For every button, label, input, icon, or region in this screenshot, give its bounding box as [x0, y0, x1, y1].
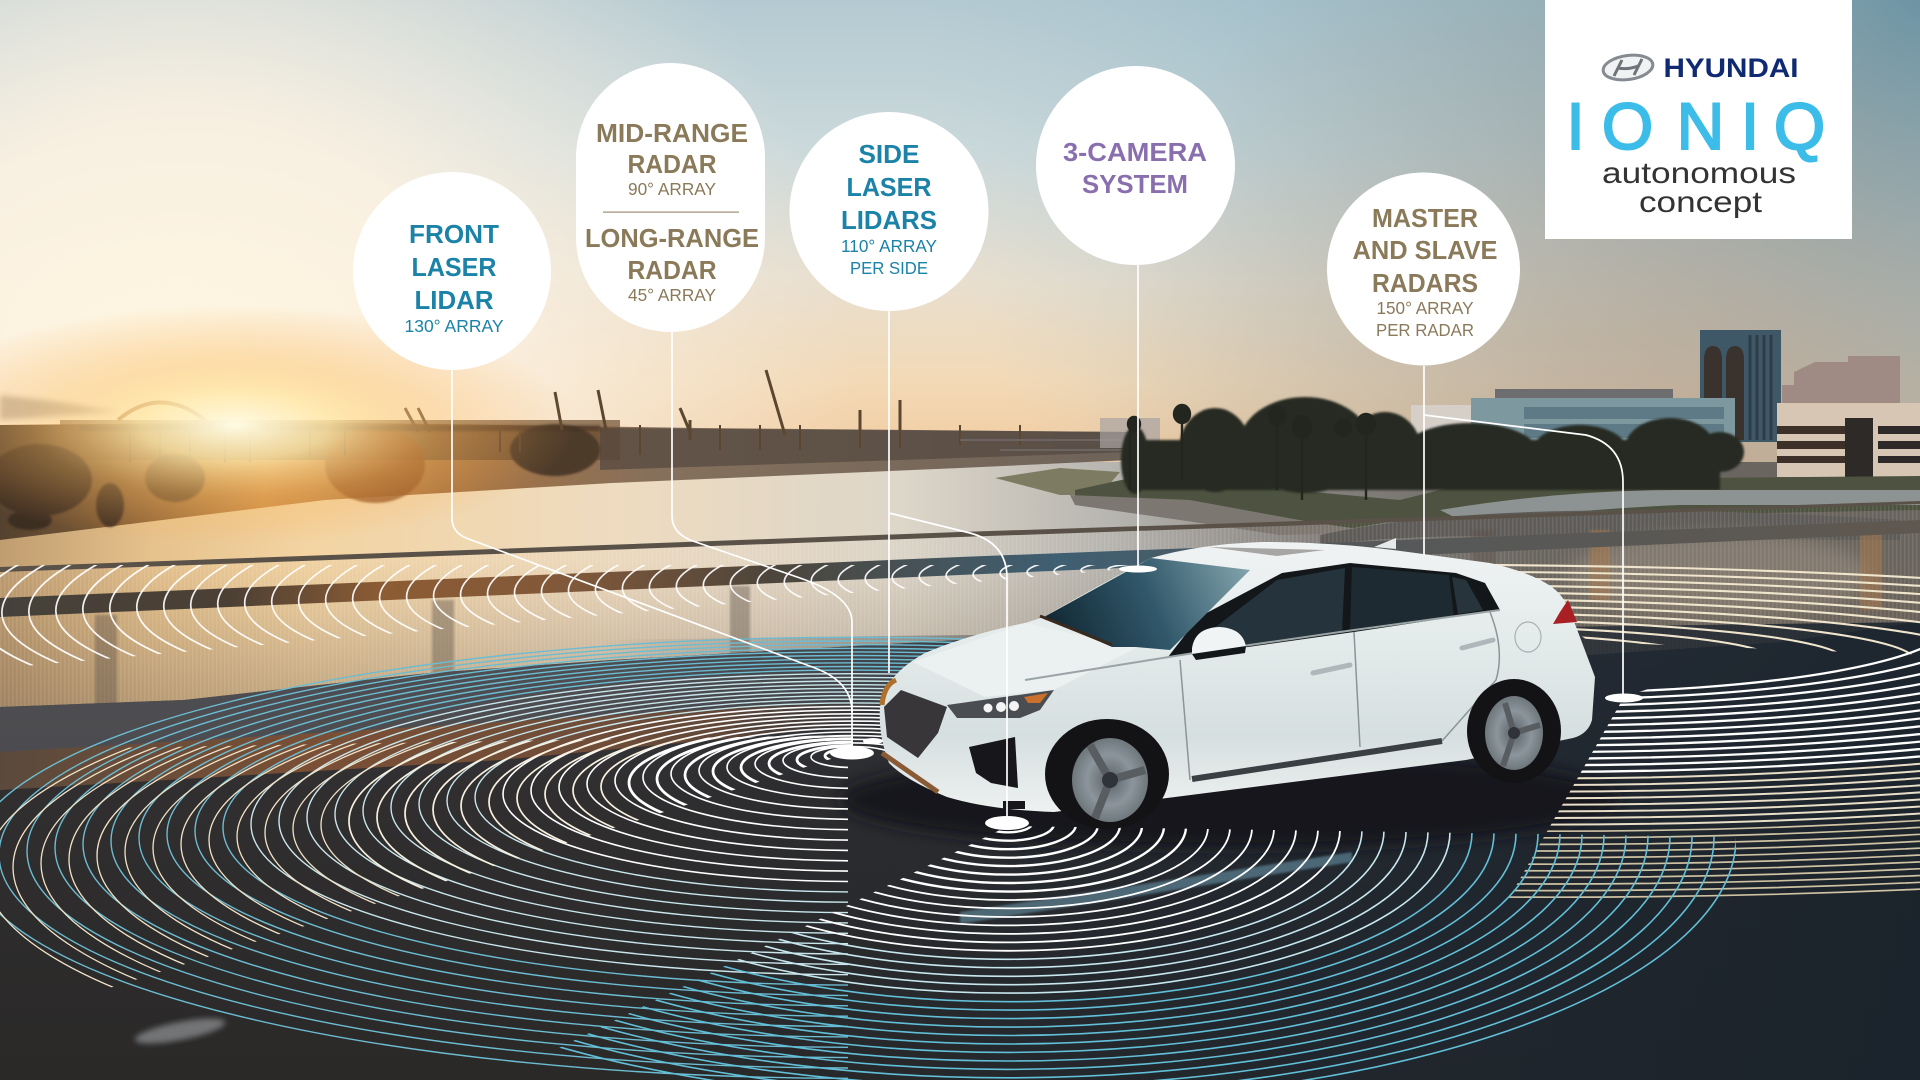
bridge railings — [0, 501, 1920, 617]
car: sunroof — [1209, 547, 1325, 556]
tagline: concept — [1639, 186, 1763, 219]
callout: mid-range and long-range radar: 90° ARRAY — [628, 179, 716, 199]
callout: master and slave radars — [1327, 172, 1520, 366]
bridge fence shading — [0, 502, 1920, 725]
sensor fan: side laser lidars, white to blue — [559, 826, 1736, 1080]
car: white Hyundai IONIQ — [880, 538, 1595, 829]
sensor fan: front laser lidar, warm white — [0, 735, 853, 988]
IONIQ wordmark: O — [1602, 89, 1653, 163]
logo panel: Hyundai IONIQ autonomous concept — [1545, 0, 1852, 239]
car: taillight — [1553, 600, 1577, 624]
river and water — [0, 462, 1920, 732]
callout: front laser lidar: LIDAR — [414, 287, 494, 315]
callout: front laser lidar: 130° ARRAY — [404, 316, 504, 336]
callout: front laser lidar: LASER — [412, 254, 496, 282]
car: fog light vent — [969, 737, 1018, 788]
right skyline buildings — [1100, 330, 1920, 478]
callout: master and slave radars: PER RADAR — [1376, 320, 1474, 340]
car: mirror — [1192, 627, 1246, 654]
callout: front laser lidar: FRONT — [409, 221, 499, 249]
car: wiper — [1040, 616, 1112, 645]
road light streaks — [133, 852, 1352, 1049]
car: front lip — [882, 753, 938, 792]
car: rear wheel — [1467, 679, 1561, 783]
sensor fan: mid and long range radar, white to blue — [0, 636, 965, 1079]
car: hood highlight — [913, 623, 1136, 697]
callout: master and slave radars: RADARS — [1372, 270, 1478, 298]
callout: mid-range and long-range radar — [576, 63, 765, 332]
tagline — [1602, 157, 1796, 219]
tagline: autonomous — [1602, 157, 1796, 190]
car: fuel cap — [1515, 622, 1541, 652]
brand wordmark: HYUNDAI — [1664, 53, 1798, 83]
car: headlight lamps — [984, 701, 1019, 712]
callout: 3-camera system: SYSTEM — [1082, 171, 1188, 199]
connector lines from labels to sensors — [452, 265, 1623, 818]
callout: side laser lidars: 110° ARRAY — [841, 236, 937, 256]
road surface — [0, 622, 1920, 1080]
callout: side laser lidars — [790, 112, 988, 311]
car: plate slot — [1003, 801, 1025, 809]
car: front door window — [1209, 568, 1345, 645]
IONIQ wordmark: Q — [1774, 89, 1825, 163]
car: windshield — [1044, 558, 1250, 650]
car: character line — [1025, 610, 1500, 680]
car: grille — [884, 690, 947, 758]
IONIQ wordmark — [1566, 89, 1825, 163]
callout: master and slave radars: MASTER — [1372, 205, 1478, 233]
IONIQ wordmark: I — [1741, 89, 1759, 163]
sun glow — [0, 305, 575, 545]
car: headlight — [947, 690, 1054, 718]
callout: front laser lidar — [353, 172, 551, 370]
icon: Hyundai emblem — [1602, 52, 1654, 83]
car: roof fin — [1374, 538, 1396, 549]
sensor fan: camera arcs on fence — [0, 565, 1132, 666]
callout: side laser lidars: LIDARS — [841, 207, 937, 235]
background: evening sky — [0, 0, 1920, 720]
car: body shell — [880, 542, 1595, 812]
callout: side laser lidars: SIDE — [858, 141, 920, 169]
callout: mid-range and long-range radar: RADAR — [628, 257, 716, 285]
car: grille sun reflection — [882, 680, 896, 705]
callout: master and slave radars: AND SLAVE — [1352, 237, 1498, 265]
IONIQ wordmark: I — [1566, 89, 1585, 163]
callout: master and slave radars: 150° ARRAY — [1376, 298, 1474, 318]
callout: mid-range and long-range radar: 45° ARRAY — [628, 285, 716, 305]
car: mirror base — [1192, 646, 1246, 660]
callout: 3-camera system: 3-CAMERA — [1063, 139, 1207, 167]
callout: side laser lidars: PER SIDE — [850, 258, 928, 278]
sensor fan: master and slave radars, right side lower — [1509, 648, 1920, 898]
car: door lines — [1180, 612, 1499, 780]
car: quarter window — [1452, 577, 1483, 614]
left shore with port skyline — [0, 370, 1130, 540]
car: rear door window — [1350, 567, 1454, 630]
car: amber signal — [1024, 693, 1048, 703]
island with palm trees — [995, 397, 1920, 617]
callout: side laser lidars: LASER — [846, 174, 932, 202]
callout: mid-range and long-range radar: LONG-RANGE — [585, 225, 759, 253]
car: side skirt — [1192, 741, 1442, 779]
callout: mid-range and long-range radar: RADAR — [628, 151, 716, 179]
sensor points — [830, 566, 1643, 830]
car: front wheel — [1045, 719, 1169, 829]
callout: mid-range and long-range radar: MID-RANGE — [596, 120, 748, 148]
sensor fan: master and slave radars, right side upper — [1492, 564, 1920, 654]
car: door handles — [1313, 640, 1493, 673]
car: window surround — [1168, 563, 1500, 657]
IONIQ wordmark: N — [1677, 89, 1724, 163]
callout: 3-camera system — [1036, 66, 1235, 265]
